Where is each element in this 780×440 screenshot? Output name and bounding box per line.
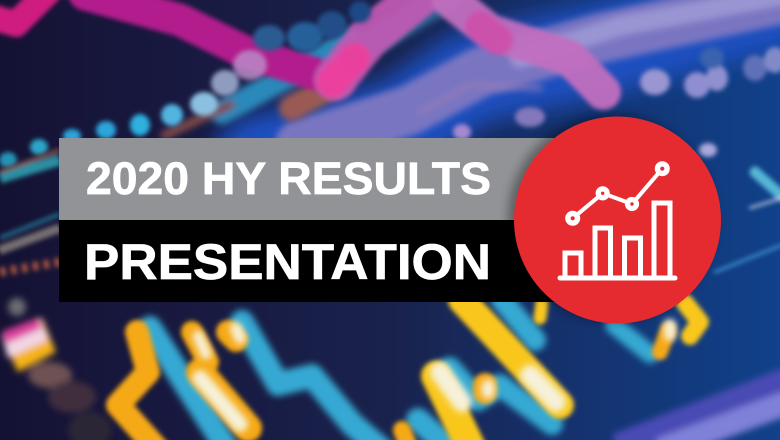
cyan chart line segments: [150, 300, 650, 440]
banner: grey title bar: [59, 138, 559, 220]
white highlights on chart lines: [198, 325, 670, 424]
icon: line chart with markers: [568, 164, 667, 223]
left edge streaks: [0, 150, 60, 272]
right side streaks: [715, 172, 780, 272]
lower left bright candle: [2, 298, 112, 440]
cyan and brown diagonal streaks: [165, 0, 450, 135]
heading: 2020 HY RESULTS: 2020 HY RESULTS: [86, 153, 491, 204]
red icon badge: [514, 116, 721, 324]
yellow chart line segments: [118, 300, 700, 440]
circle shadow: [508, 114, 716, 322]
purple band bottom right: [620, 385, 780, 440]
heading: PRESENTATION: PRESENTATION: [84, 234, 491, 290]
blue light band: [260, 0, 780, 160]
banner: black title bar: [59, 220, 559, 302]
bokeh dots: [0, 1, 780, 168]
icon: bar chart: [560, 203, 675, 278]
magenta ribbon: [0, 0, 603, 92]
